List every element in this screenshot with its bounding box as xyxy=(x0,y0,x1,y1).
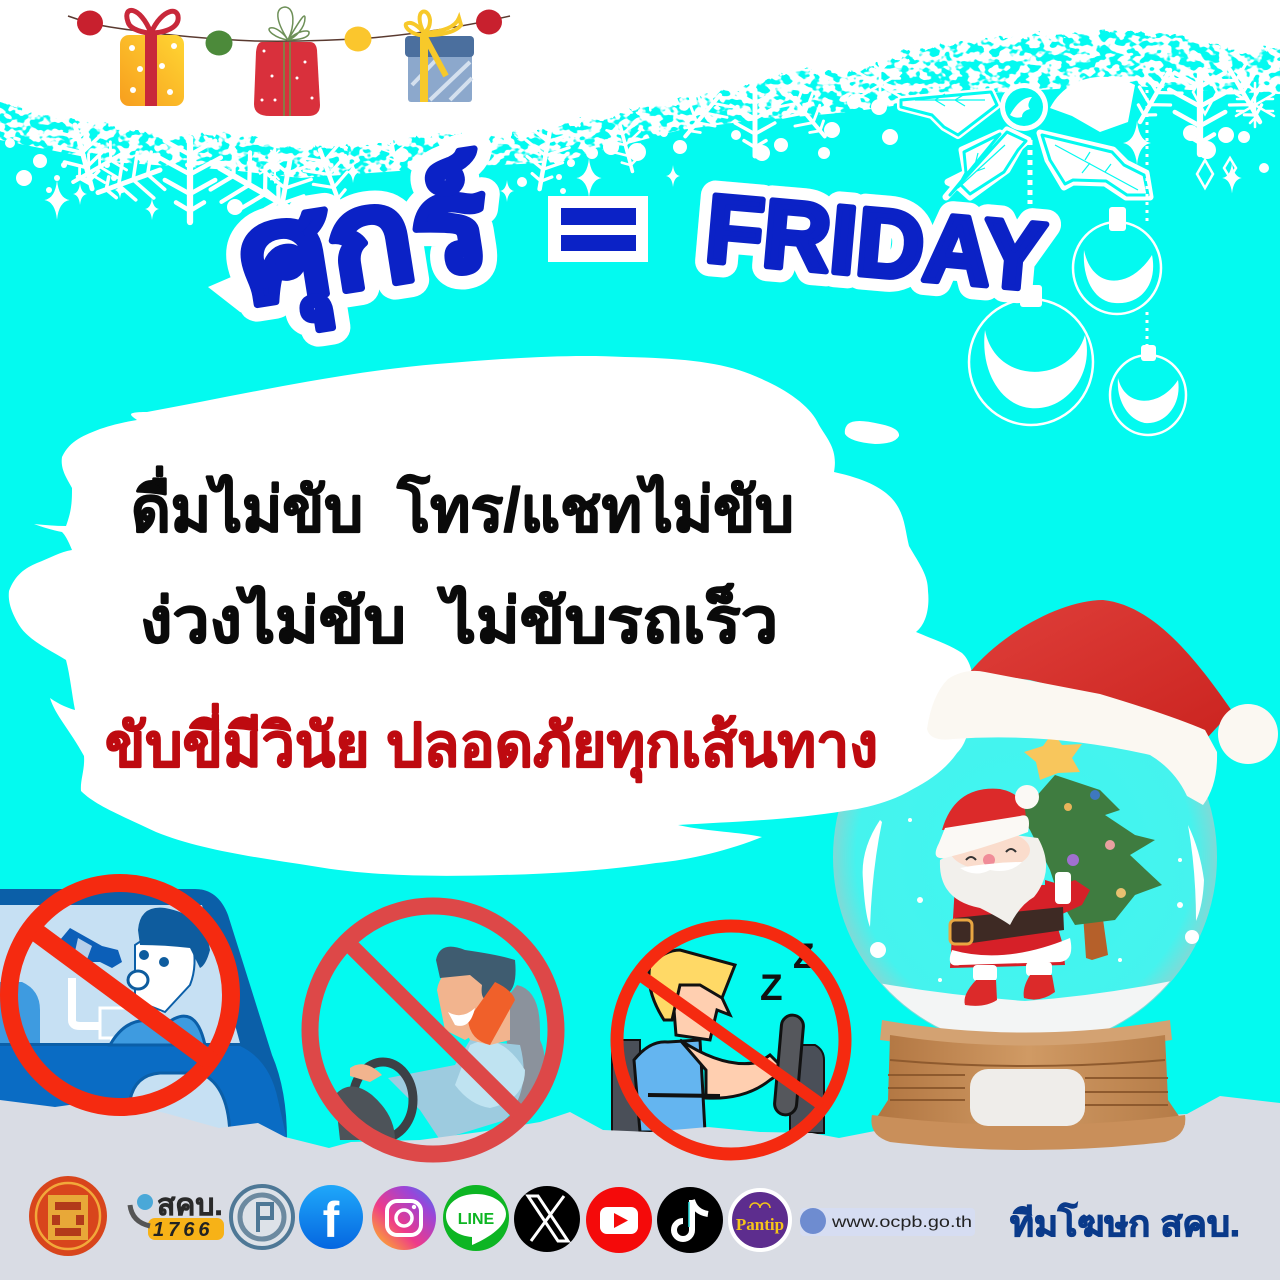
icon: TikTok xyxy=(657,1187,723,1253)
icon: Facebook xyxy=(299,1185,363,1249)
logo: seal xyxy=(29,1176,107,1256)
logo: OCPB hotline 1766: 1766 xyxy=(153,1219,214,1241)
gift: blue xyxy=(405,11,474,102)
icon: Pantip xyxy=(730,1190,790,1250)
title: equals sign xyxy=(548,196,648,262)
panel: driver on phone xyxy=(335,947,545,1140)
icon: X xyxy=(514,1186,580,1252)
slogan text xyxy=(105,466,878,783)
prohibition sign: drinking xyxy=(9,883,231,1107)
holly: lower right leaf xyxy=(1040,133,1150,197)
tree baubles xyxy=(1064,790,1126,898)
ornament: large xyxy=(969,285,1093,425)
website link xyxy=(800,1208,975,1236)
ornament: lower right xyxy=(1110,345,1186,435)
icon: Instagram xyxy=(372,1186,436,1250)
logo: OCPB hotline 1766: สคบ. xyxy=(157,1189,223,1222)
panel: driver drinking in car xyxy=(0,889,287,1140)
icon: Facebook: f xyxy=(323,1192,340,1248)
santa face xyxy=(950,830,1030,870)
holly: centre ring xyxy=(1000,83,1048,131)
holly: upper left leaf xyxy=(901,92,997,135)
speech bubble xyxy=(9,356,974,876)
title: FRIDAY: FRIDAY xyxy=(702,175,1050,311)
website link: www.ocpb.go.th xyxy=(831,1214,972,1231)
star xyxy=(1024,732,1082,780)
santa boots xyxy=(964,962,1055,1006)
globe snow floor xyxy=(882,981,1170,1032)
ornament: upper right xyxy=(1073,207,1161,314)
snowy ground xyxy=(0,1096,1280,1280)
gift: yellow xyxy=(120,10,184,106)
panel: sleepy driver xyxy=(612,937,824,1135)
tree xyxy=(1020,775,1162,925)
snow border at top xyxy=(0,0,1280,232)
ornament balls xyxy=(77,10,502,56)
icon: sleeping z letters xyxy=(760,937,814,1008)
gift: red xyxy=(254,7,320,116)
icon: LINE: LINE xyxy=(458,1211,495,1228)
santa body xyxy=(950,885,1065,968)
globe highlights xyxy=(863,818,1204,982)
santa hat over globe xyxy=(927,600,1278,805)
icon: sleeping z letters: Z xyxy=(793,937,814,976)
globe wooden base xyxy=(871,1020,1185,1150)
slogan line 2: ง่วงไม่ขับ ไม่ขับรถเร็ว xyxy=(140,583,778,656)
icon: sleeping z letters: Z xyxy=(760,967,783,1008)
globe glass xyxy=(833,665,1217,1049)
holly: upper right leaf xyxy=(1050,77,1135,132)
title: Thai word: ศุกร์ xyxy=(228,147,500,341)
slogan line 1: ดื่มไม่ขับ โทร/แชทไม่ขับ xyxy=(131,466,794,545)
icon: Pantip: Pantip xyxy=(736,1215,784,1234)
bubble small blob xyxy=(845,421,899,444)
snow globe xyxy=(833,665,1217,1150)
footer logos xyxy=(29,1176,1240,1256)
tree trunk xyxy=(1083,912,1108,960)
garland with gifts xyxy=(68,7,510,116)
icon: LINE xyxy=(443,1185,509,1251)
icon: YouTube xyxy=(586,1187,652,1253)
slogan line 3: ขับขี่มีวินัย ปลอดภัยทุกเส้นทาง xyxy=(105,703,878,783)
ornaments: outlined baubles xyxy=(969,207,1186,435)
logo: OCPB circle xyxy=(231,1186,293,1248)
prohibition sign: phone xyxy=(310,906,556,1154)
santa with tree xyxy=(936,732,1162,1006)
garland string xyxy=(68,16,510,41)
logo: OCPB hotline 1766 xyxy=(130,1189,224,1241)
holly: lower left leaf xyxy=(946,130,1028,197)
santa hat xyxy=(942,789,1026,830)
holly decoration xyxy=(901,77,1150,346)
santa beard xyxy=(940,832,1046,925)
team credit: ทีมโฆษก สคบ. xyxy=(1010,1202,1240,1244)
prohibition sign: sleepy xyxy=(617,926,845,1154)
title: Thai word: ศุกร์ xyxy=(228,147,500,341)
title xyxy=(208,147,1050,341)
title: FRIDAY: FRIDAY xyxy=(702,175,1050,311)
